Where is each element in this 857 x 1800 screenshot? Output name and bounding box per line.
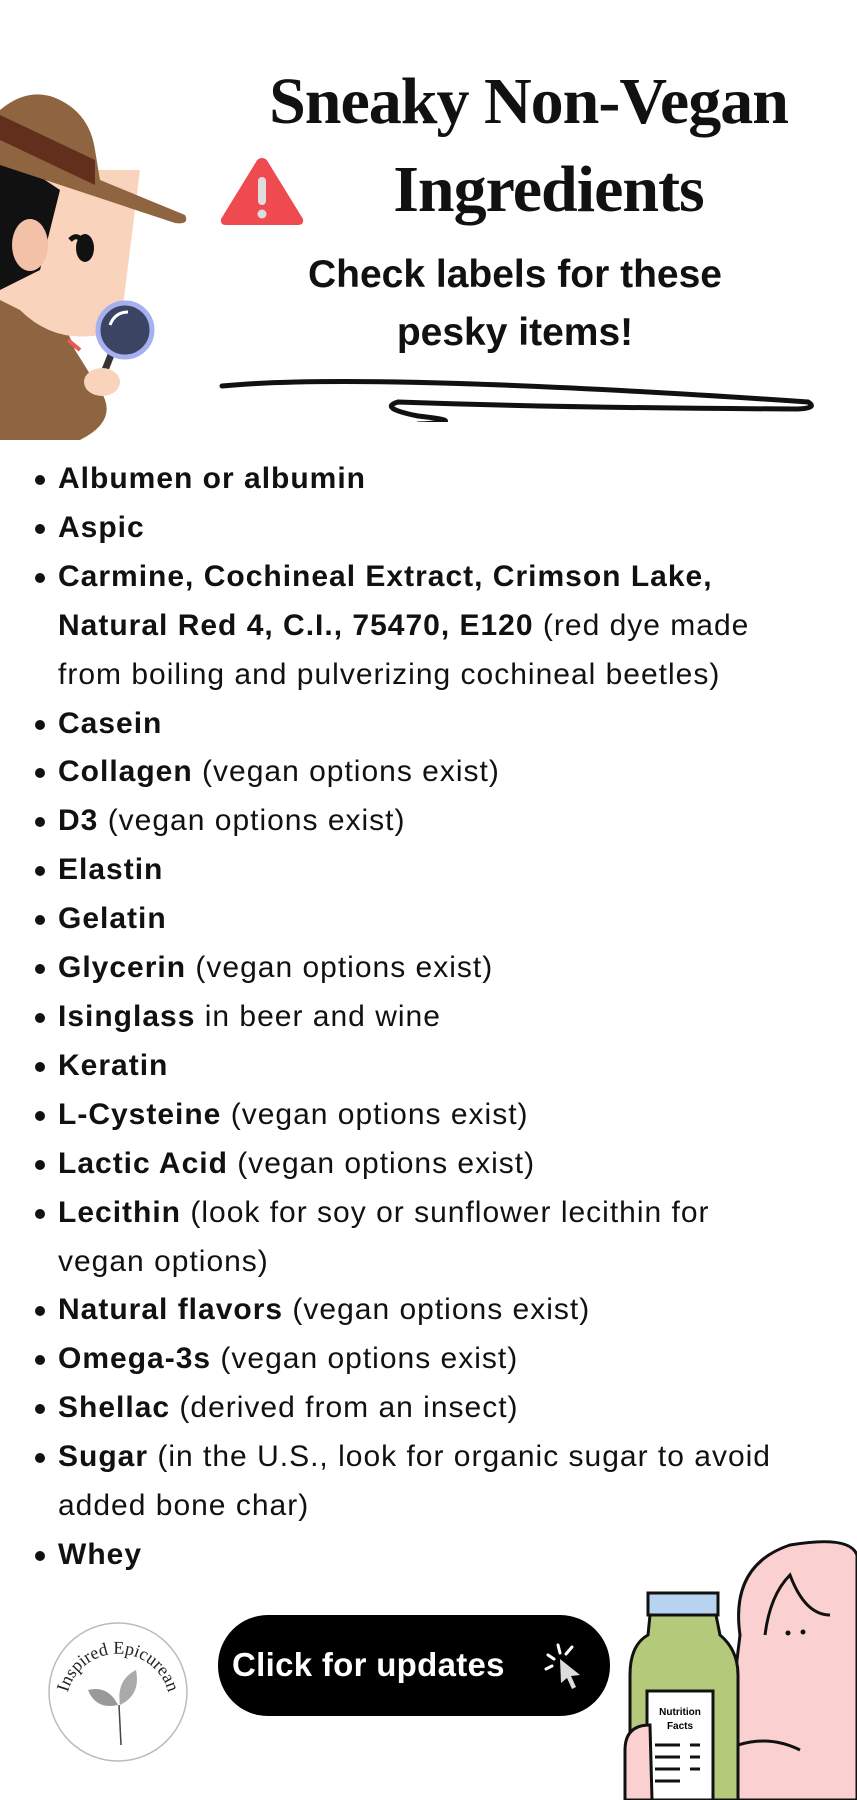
- ingredient list: Casein: [58, 707, 162, 740]
- ingredient list: Albumen or albumin: [58, 462, 366, 495]
- ingredient list: Collagen (vegan options exist): [58, 755, 500, 788]
- ingredient list: Keratin: [58, 1049, 168, 1082]
- button: click for updates: [218, 1615, 610, 1716]
- ingredient list: vegan options): [58, 1244, 269, 1278]
- ingredient list: Carmine, Cochineal Extract, Crimson Lake,: [58, 560, 713, 593]
- illustration: woman with bottle: Facts: [667, 1721, 693, 1732]
- ingredient list: D3 (vegan options exist): [58, 804, 406, 837]
- ingredient list: from boiling and pulverizing cochineal beetles): [58, 658, 720, 691]
- button: click for updates: Click for updates: [232, 1646, 505, 1683]
- logo: Inspired Epicurean: [48, 1622, 188, 1762]
- ingredient list: Whey: [58, 1538, 142, 1571]
- illustration: woman with bottle: [624, 1540, 857, 1800]
- icon: warning triangle: [220, 158, 304, 225]
- ingredient list: Glycerin (vegan options exist): [58, 951, 493, 984]
- ingredient list: Gelatin: [58, 902, 167, 935]
- subtitle: [308, 253, 722, 354]
- ingredient list: Natural flavors (vegan options exist): [58, 1293, 590, 1326]
- ingredient list: Sugar (in the U.S., look for organic sugar to avoid: [58, 1440, 771, 1473]
- ingredient list: Lactic Acid (vegan options exist): [58, 1147, 535, 1180]
- ingredient list: Shellac (derived from an insect): [58, 1391, 519, 1424]
- ingredient list: Elastin: [58, 853, 163, 886]
- ingredient list: added bone char): [58, 1489, 309, 1522]
- ingredient list: Aspic: [58, 511, 145, 544]
- logo: Inspired Epicurean: Inspired Epicurean: [56, 1642, 176, 1692]
- title: Ingredients: [393, 153, 704, 226]
- subtitle: pesky items!: [397, 311, 633, 354]
- ingredient list: Natural Red 4, C.I., 75470, E120 (red dye made: [58, 609, 749, 642]
- illustration: detective: [0, 94, 186, 440]
- title: Sneaky Non-Vegan: [269, 65, 788, 138]
- ingredient list: L-Cysteine (vegan options exist): [58, 1098, 529, 1131]
- ingredient list: Lecithin (look for soy or sunflower lecithin for: [58, 1196, 710, 1229]
- ingredient list: Omega-3s (vegan options exist): [58, 1342, 518, 1375]
- squiggle underline: [220, 379, 814, 422]
- icon: cursor click: [544, 1644, 580, 1689]
- ingredient list: Isinglass in beer and wine: [58, 1000, 441, 1033]
- title: [269, 65, 788, 226]
- illustration: woman with bottle: Nutrition: [659, 1707, 701, 1718]
- subtitle: Check labels for these: [308, 253, 722, 296]
- ingredient list: [35, 462, 771, 1571]
